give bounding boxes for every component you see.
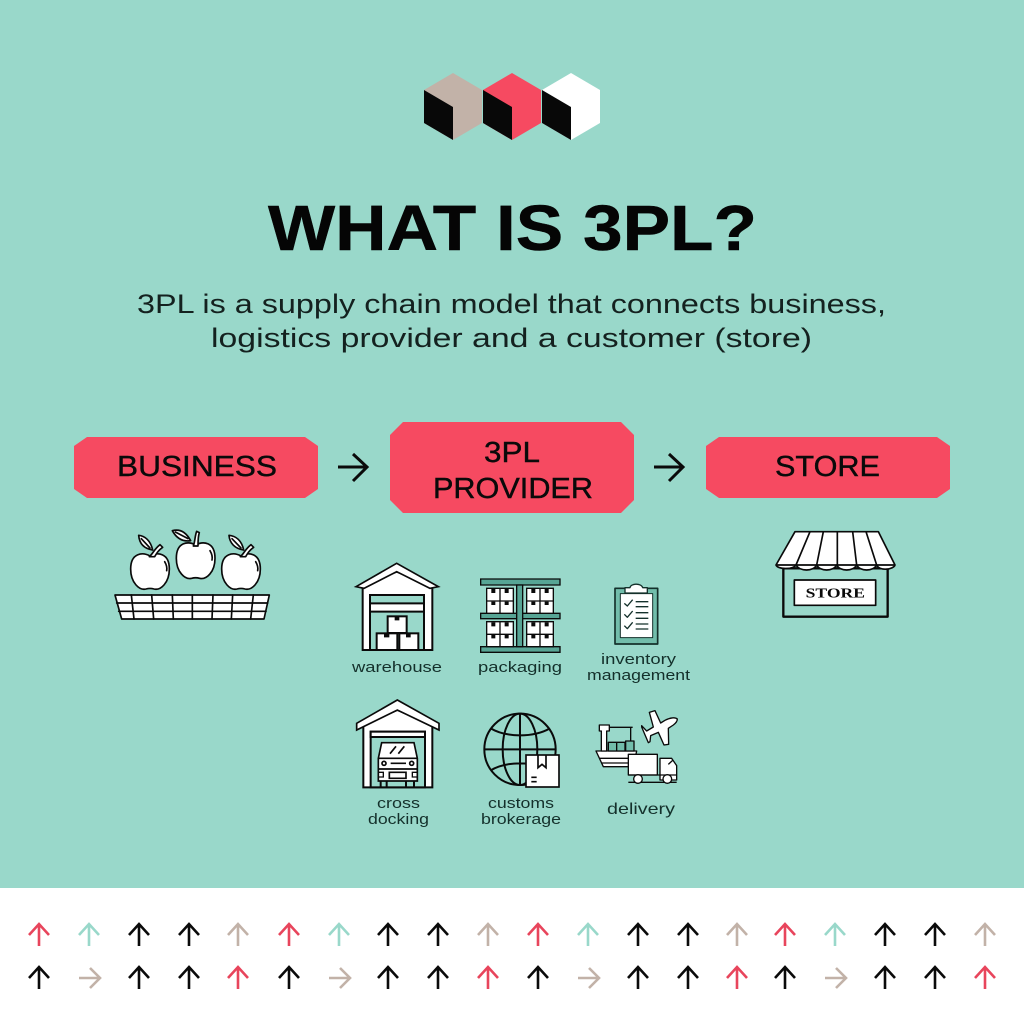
panel: 3PL provider label: PROVIDER	[433, 473, 593, 505]
panel: 3PL provider label: 3PL	[484, 437, 540, 469]
label: customs brokerage: brokerage	[481, 811, 561, 828]
label: cross docking: docking	[368, 811, 429, 828]
panel: store label: STORE	[775, 451, 880, 483]
ship	[596, 751, 637, 767]
label: cross docking: cross	[377, 795, 420, 812]
icon: packaging shelves	[481, 579, 560, 652]
logo: three cubes	[424, 73, 600, 140]
plane	[642, 711, 677, 745]
subtitle: logistics provider and a customer (store)	[211, 323, 812, 353]
icon: store front	[776, 532, 895, 617]
arrow: business to provider	[338, 454, 367, 481]
label: inventory management	[587, 651, 691, 684]
label: delivery: delivery	[607, 801, 675, 818]
label: inventory management: management	[587, 667, 691, 684]
label: customs brokerage	[481, 795, 561, 828]
label: customs brokerage: customs	[488, 795, 554, 812]
title: WHAT IS 3PL?	[268, 192, 757, 264]
icon: delivery ship plane truck	[596, 711, 677, 783]
panel: business label: BUSINESS	[117, 451, 277, 483]
truck	[628, 754, 657, 775]
panel: business label	[74, 437, 318, 498]
icon: clipboard	[615, 584, 658, 644]
label: warehouse: warehouse	[351, 659, 442, 676]
panel: 3PL provider label	[390, 422, 634, 513]
label: cross docking	[368, 795, 429, 828]
arrow: provider to store	[654, 454, 683, 481]
icon: cross docking truck	[357, 700, 439, 787]
panel: store label	[706, 437, 950, 498]
icon: warehouse	[356, 563, 438, 650]
subtitle: 3PL is a supply chain model that connects business,	[137, 289, 886, 319]
label: packaging: packaging	[478, 659, 562, 676]
label: inventory management: inventory	[601, 651, 677, 668]
store sign text: STORE	[806, 585, 865, 600]
icon: apples in basket	[115, 530, 269, 619]
arrow pattern	[29, 924, 995, 989]
subtitle	[137, 289, 886, 353]
icon: globe with parcel	[484, 714, 559, 787]
